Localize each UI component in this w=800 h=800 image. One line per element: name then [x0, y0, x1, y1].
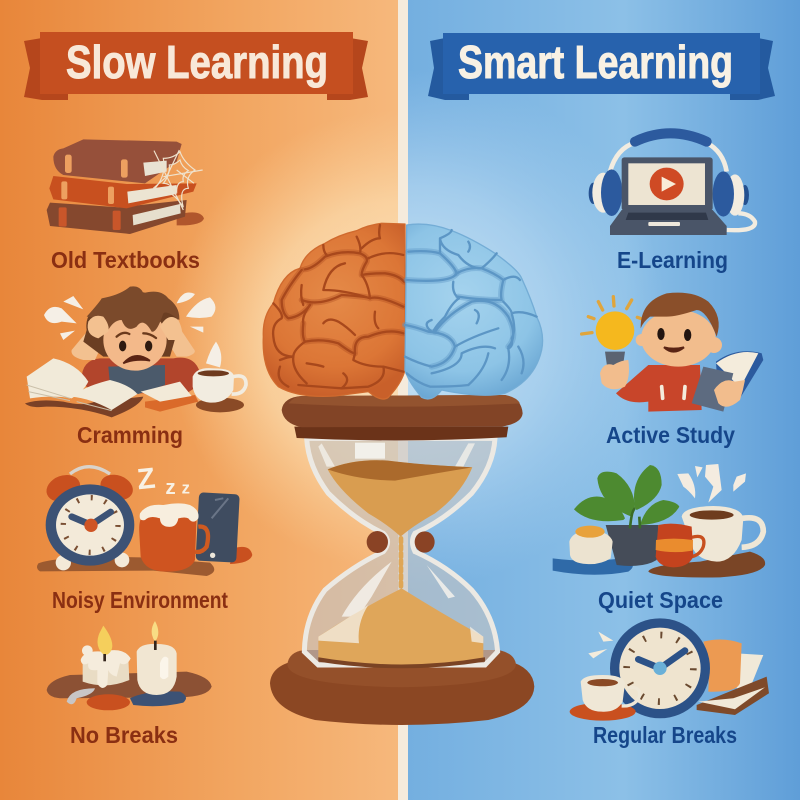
icon: e-learning laptop: [589, 133, 755, 235]
icon: regular breaks: [570, 618, 769, 721]
hourglass glass: [304, 438, 498, 665]
icon: old textbooks: [47, 139, 204, 234]
label: Active Study: Active Study: [606, 422, 735, 448]
label: E-Learning: E-Learning: [617, 247, 728, 273]
heading banner: Slow Learning: [24, 32, 368, 100]
sand stream: [394, 538, 408, 587]
hourglass top plate: [282, 395, 523, 440]
label: Cramming: Cramming: [77, 422, 183, 448]
label: Noisy Environment: Noisy Environment: [52, 587, 228, 613]
icon: candles: [47, 621, 212, 710]
label: Old Textbooks: Old Textbooks: [51, 247, 200, 273]
label: Quiet Space: Quiet Space: [598, 587, 723, 613]
icon: noisy environment: z: [182, 478, 190, 497]
icon: active study: [582, 293, 763, 412]
icon: cramming student: [25, 286, 246, 417]
label: No Breaks: No Breaks: [70, 722, 178, 748]
heading banner: Smart Learning: [428, 33, 775, 100]
panel: smart learning background: [408, 0, 800, 800]
illustration: brain: [263, 223, 543, 399]
brain left hemisphere: [263, 223, 405, 399]
illustration: hourglass: [270, 438, 534, 725]
heading banner: Smart Learning: Smart Learning: [458, 36, 733, 88]
sand lower: [318, 588, 485, 668]
sand upper: [328, 460, 472, 537]
brain right hemisphere: [405, 224, 543, 399]
icon: noisy environment: z: [165, 476, 176, 499]
hourglass base: [270, 650, 534, 725]
heading banner: Slow Learning: Slow Learning: [66, 36, 328, 88]
label: Regular Breaks: Regular Breaks: [593, 722, 737, 748]
hourglass knobs: [367, 531, 435, 553]
icon: quiet space: [553, 464, 765, 577]
icon: noisy environment: [37, 462, 252, 576]
panel: slow learning background: [0, 0, 398, 800]
icon: noisy environment: Z: [136, 462, 157, 496]
